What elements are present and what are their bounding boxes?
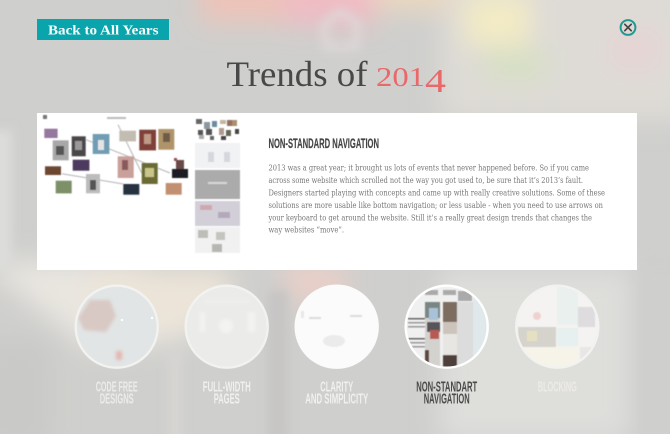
label <box>96 380 138 408</box>
panel body text <box>268 164 605 235</box>
screenshot: page thumbnails <box>195 119 240 253</box>
label <box>416 380 477 408</box>
trend: code free designs: CODE FREE <box>96 380 138 396</box>
label: FULL-WIDTH <box>203 380 251 396</box>
panel body text: your keyboard to get around the website. Still it’s a really great design trends that changes the <box>268 213 592 222</box>
label: NON-STANDART <box>416 380 477 396</box>
back button <box>37 19 169 40</box>
panel body text: way websites “move”. <box>268 226 344 235</box>
panel body text: 2013 was a great year; it brought us lots of events that never happened before. So if you came <box>268 164 589 173</box>
label: BLOCKING <box>538 380 577 396</box>
label <box>203 380 251 408</box>
title year: 201 <box>376 62 425 92</box>
title year: 4 <box>425 63 446 100</box>
panel body text: Designers started playing with concepts and came up with really creative solutions. Some of these <box>268 188 605 198</box>
trend: clarity and simplicity <box>294 284 379 408</box>
panel: trend detail <box>37 113 637 270</box>
label: NAVIGATION <box>424 392 470 408</box>
label: PAGES <box>214 392 240 408</box>
trend: full-width pages <box>186 286 268 408</box>
label: DESIGNS <box>100 392 134 408</box>
panel body text: solutions are more usable like bottom navigation; or less usable - when you need to use arrows on <box>268 201 603 210</box>
panel body text: across some website which scrolled not the way you got used to, be sure that it’s 2013’s fault. <box>268 176 583 185</box>
label <box>305 380 368 408</box>
back button: Back to All Years <box>48 23 159 38</box>
trend: non-standart navigation (active) <box>404 284 489 404</box>
trend: blocking <box>516 285 598 396</box>
panel heading: NON-STANDARD NAVIGATION <box>268 135 379 151</box>
title: Trends of <box>226 54 368 94</box>
icon: close <box>621 20 635 35</box>
title year <box>376 62 446 100</box>
label: AND SIMPLICITY <box>305 392 368 408</box>
screenshot: photo map <box>43 115 188 195</box>
label: CLARITY <box>320 380 353 396</box>
trend: code free designs <box>76 286 158 408</box>
